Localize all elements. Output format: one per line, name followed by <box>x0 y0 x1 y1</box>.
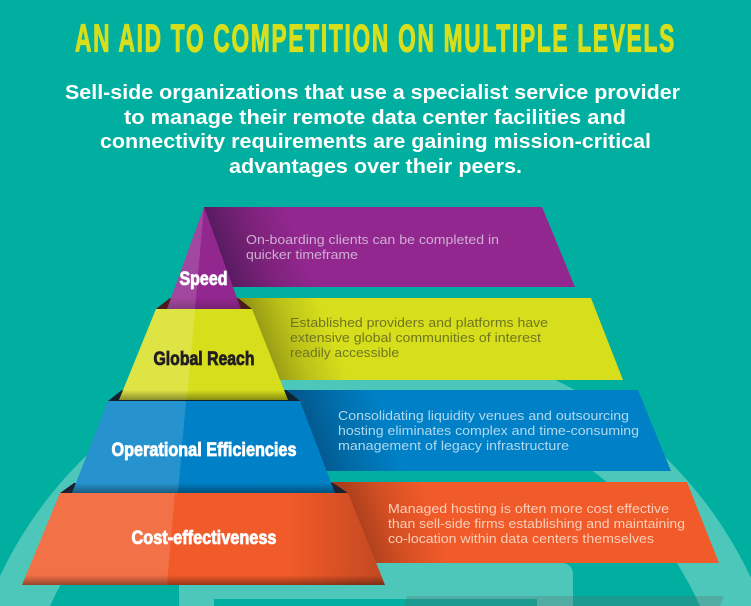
label: cost-effectiveness: Cost-effectiveness <box>132 528 276 549</box>
pyramid tier: speed <box>156 207 252 309</box>
panel: cost-effectiveness description: Managed hosting is often more cost effective <box>388 501 669 516</box>
background rounded building outline <box>179 563 573 606</box>
panel: cost-effectiveness description <box>330 482 719 563</box>
translucent strip at bottom <box>404 596 724 606</box>
label: speed: Speed <box>180 269 228 290</box>
panel: speed description: On-boarding clients can be completed in <box>246 232 499 247</box>
panel: global reach description: Established providers and platforms have <box>290 315 548 330</box>
panel: global reach description: extensive global communities of interest <box>290 330 541 345</box>
background arc band <box>0 339 751 606</box>
pyramid tier: cost-effectiveness <box>22 493 385 585</box>
intro text: Sell-side organizations that use a specialist service provider <box>65 82 680 104</box>
pyramid tier: operational efficiencies <box>60 401 348 493</box>
label: operational efficiencies: Operational Efficiencies <box>112 440 296 461</box>
panel: operational efficiencies description: management of legacy infrastructure <box>338 438 569 453</box>
panel: global reach description: readily accessible <box>290 345 399 360</box>
intro text <box>65 82 680 178</box>
panel: speed description: quicker timeframe <box>246 247 358 262</box>
intro text: to manage their remote data center facilities and <box>124 107 626 129</box>
panel: operational efficiencies description: Consolidating liquidity venues and outsourcing <box>338 408 629 423</box>
intro text: advantages over their peers. <box>229 156 522 178</box>
panel: operational efficiencies description <box>285 390 671 471</box>
panel: cost-effectiveness description: than sell-side firms establishing and maintaining <box>388 516 685 531</box>
panel: operational efficiencies description: hosting eliminates complex and time-consuming <box>338 423 639 438</box>
label: global reach: Global Reach <box>154 349 254 370</box>
intro text: connectivity requirements are gaining mission-critical <box>100 131 651 153</box>
panel: cost-effectiveness description: co-location within data centers themselves <box>388 531 655 546</box>
panel: global reach description <box>235 298 623 380</box>
pyramid tier: global reach <box>108 309 300 401</box>
panel: speed description <box>204 207 575 287</box>
